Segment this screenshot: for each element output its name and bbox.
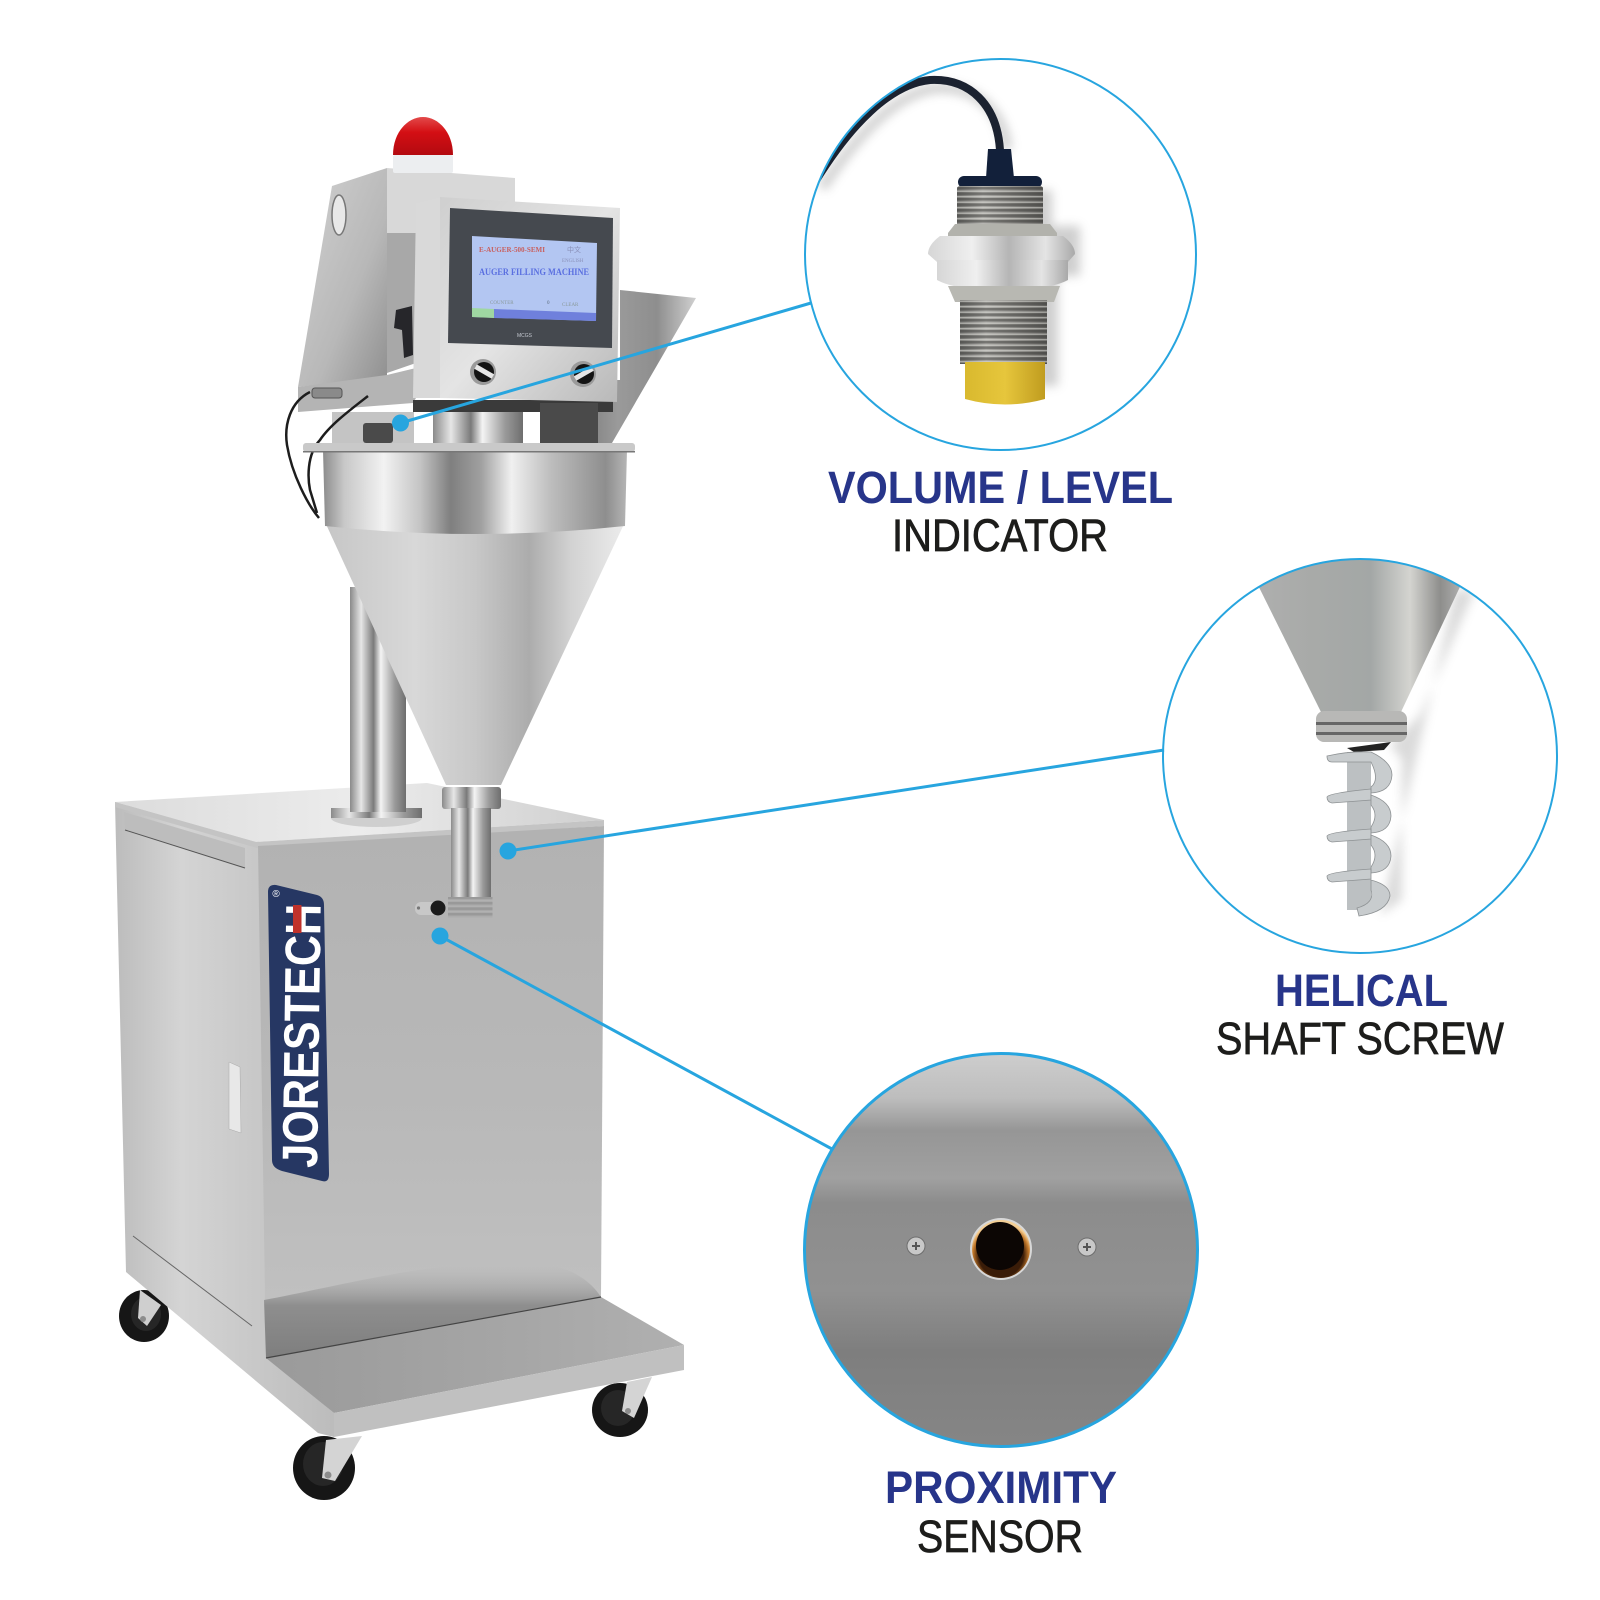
label: shaft screw: SHAFT SCREW: [1216, 1013, 1504, 1064]
platform top: [266, 1297, 684, 1413]
level sensor head: [363, 423, 393, 443]
nozzle: [442, 787, 501, 918]
language english: ENGLISH: [562, 259, 584, 264]
front caster: [293, 1436, 362, 1500]
bezel brand: MCGS: [517, 333, 533, 339]
cabinet front face: [258, 826, 604, 1358]
sensor hole: [970, 1218, 1032, 1280]
sensor wires: [286, 388, 368, 518]
language option: 中文: [567, 245, 581, 254]
machine: auger filler: [115, 117, 696, 1500]
ring: [805, 59, 1196, 450]
touch panel box: [413, 197, 620, 402]
label: indicator: INDICATOR: [892, 510, 1108, 561]
panel: helical shaft screw: [1163, 555, 1557, 1064]
brand name: JORESTECH: [272, 903, 332, 1168]
screen status bar: [494, 309, 596, 321]
cable: [815, 80, 1000, 182]
seal emblem: [332, 195, 346, 235]
registered mark: ®: [272, 889, 280, 900]
label: helical: HELICAL: [1275, 965, 1448, 1016]
neck under panel: [332, 400, 613, 444]
auger shadow: [1380, 590, 1475, 915]
sensor flange: [928, 236, 1075, 262]
right caster: [592, 1377, 652, 1437]
label: volume / level: VOLUME / LEVEL: [828, 462, 1173, 513]
cable shadow: [822, 88, 1007, 188]
column flange: [331, 809, 422, 827]
hopper bowl: [323, 450, 627, 534]
yellow tip: [965, 362, 1045, 404]
front reflection: [264, 1262, 601, 1358]
sensor illustration: [815, 80, 1080, 405]
cable boot: [986, 149, 1014, 178]
machine title: AUGER FILLING MACHINE: [479, 267, 589, 277]
wire connector: [312, 388, 342, 398]
auger illustration: [1243, 555, 1475, 916]
hex nut: [948, 224, 1057, 236]
housing base plate: [298, 368, 416, 412]
internal wires: [394, 306, 413, 358]
label: proximity: PROXIMITY: [885, 1462, 1117, 1513]
screen title: E-AUGER-500-SEMI: [479, 245, 545, 254]
hopper: [303, 443, 635, 785]
counter label: COUNTER: [490, 301, 514, 306]
control housing: [298, 168, 515, 412]
hopper rim: [303, 443, 635, 452]
sensor ring: [937, 260, 1068, 286]
cabinet left side: [115, 802, 334, 1437]
gap shadow: [1347, 742, 1391, 752]
logo badge: [268, 885, 332, 1181]
clear label: CLEAR: [562, 303, 579, 308]
housing side: [298, 168, 387, 387]
threaded tip: [448, 897, 492, 918]
screen: [472, 236, 597, 321]
threaded collar: [1316, 711, 1407, 742]
cabinet body: [115, 783, 684, 1437]
platform edge: [334, 1345, 684, 1437]
panel: proximity sensor: [800, 1050, 1204, 1562]
left screw: [907, 1237, 925, 1255]
ring: [804, 1054, 1198, 1446]
logo red bar: [293, 905, 302, 933]
screen bezel: [448, 208, 613, 348]
label: sensor: SENSOR: [917, 1511, 1083, 1562]
beacon light: [393, 117, 453, 173]
lower nut: [948, 286, 1060, 302]
proximity hole on cabinet: [415, 900, 446, 916]
red dome: [393, 117, 453, 155]
sensor shadow: [1030, 190, 1080, 386]
steel plate: [800, 1050, 1204, 1452]
cabinet top: [115, 783, 604, 842]
housing front: [387, 168, 515, 233]
rear loading funnel: [540, 290, 696, 443]
upper thread: [957, 186, 1043, 228]
rear left caster: [119, 1290, 169, 1342]
auger cone: [1260, 560, 1460, 712]
left knob: [470, 359, 496, 385]
flights: [1327, 752, 1392, 916]
sensor bracket: [332, 412, 414, 444]
leader: proximity sensor: [432, 928, 832, 1149]
door latch: [229, 1062, 241, 1133]
door lip: [124, 812, 245, 868]
panel: volume level indicator: [805, 59, 1196, 561]
ring: [1163, 559, 1557, 953]
callout lines and dots: [392, 303, 1164, 1149]
support column: [331, 587, 422, 827]
right screw: [1078, 1238, 1096, 1256]
right knob: [570, 361, 596, 387]
shaft: [1347, 752, 1371, 910]
leader: helical screw: [500, 750, 1164, 860]
sensor cap: [958, 176, 1042, 186]
lower thread: [960, 300, 1047, 364]
counter value: 0: [547, 301, 550, 306]
hopper cone: [325, 522, 625, 785]
leader: volume level: [392, 303, 811, 432]
